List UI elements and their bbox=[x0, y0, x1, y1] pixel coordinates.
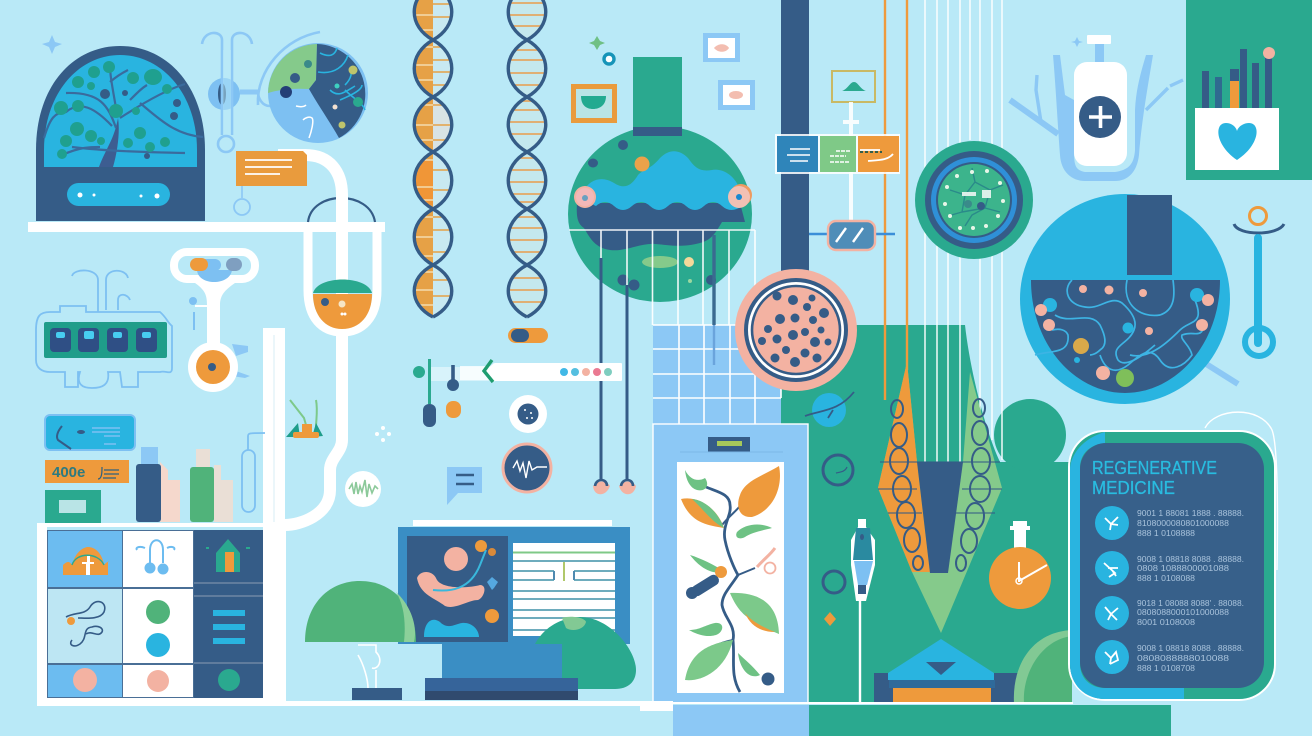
icon: thermometer probe bbox=[202, 33, 258, 152]
flask liquid bbox=[313, 280, 372, 329]
tissue diagram circle bbox=[1020, 194, 1238, 404]
list item 1: 9001 1 88081 1888 . 88888. bbox=[1137, 509, 1244, 518]
green dome right bbox=[1014, 630, 1072, 703]
drip lines with pink ends bbox=[593, 235, 714, 494]
frame icon with mound bbox=[832, 71, 875, 102]
circuit chip module bbox=[36, 270, 172, 388]
regenerative medicine panel bbox=[1069, 412, 1277, 700]
list item 4: 0808088888010088 bbox=[1137, 654, 1230, 663]
list item 3: 8001 0108008 bbox=[1137, 618, 1196, 627]
ring badges bbox=[823, 455, 853, 593]
list item 1 bbox=[1095, 506, 1244, 540]
anatomy illustration bbox=[417, 540, 499, 637]
cell: tools bbox=[48, 589, 122, 663]
helix funnel bbox=[878, 362, 1002, 633]
list item 4 bbox=[1095, 640, 1244, 674]
list item 3 bbox=[1095, 596, 1244, 630]
list item 4: 9008 1 08818 8088 . 88888. bbox=[1137, 644, 1244, 653]
list item 2 bbox=[1095, 551, 1244, 585]
dark vertical column bbox=[781, 0, 809, 275]
orange label: 400e bbox=[52, 464, 85, 481]
microscope lamp bbox=[174, 252, 255, 392]
document bbox=[513, 543, 615, 636]
cell: tent bbox=[48, 531, 122, 587]
teal bush bbox=[535, 617, 636, 689]
DNA helix right bbox=[506, 0, 548, 318]
sparkle dots bbox=[375, 426, 391, 442]
DNA helix left bbox=[412, 0, 454, 318]
clock bbox=[989, 521, 1051, 609]
leaves bbox=[681, 466, 780, 680]
orange label bbox=[45, 460, 129, 483]
blue picture frame one bbox=[703, 33, 740, 62]
base rail bbox=[38, 701, 1073, 711]
icon: sparkle bbox=[42, 35, 62, 54]
buds bbox=[686, 548, 776, 686]
thin vertical strands bbox=[885, 0, 1002, 462]
panel heading: REGENERATIVE bbox=[1092, 458, 1217, 478]
status pill bbox=[67, 183, 170, 206]
health chart card bbox=[1186, 0, 1312, 180]
orange note bbox=[234, 151, 307, 215]
cell disc badge bbox=[509, 395, 547, 433]
panel heading: MEDICINE bbox=[1092, 478, 1175, 498]
cell: dots bbox=[123, 589, 193, 663]
frame with data grid bbox=[37, 523, 286, 706]
green globe with chimney bbox=[568, 57, 752, 302]
monitor bbox=[398, 520, 630, 700]
house device bbox=[874, 639, 1020, 703]
blue picture frame two bbox=[718, 80, 755, 110]
cell: stethoscope bbox=[123, 531, 193, 587]
green dome and stand bbox=[305, 581, 416, 700]
tool with ring bbox=[1234, 208, 1284, 356]
blue cloud bbox=[583, 151, 742, 210]
IV bag bbox=[851, 519, 875, 703]
globe spots bbox=[588, 140, 716, 290]
list item 4: 888 1 0108708 bbox=[1137, 664, 1196, 673]
pie circle of tissue bbox=[258, 32, 368, 143]
bottles bbox=[136, 447, 233, 522]
three tab header bbox=[775, 134, 900, 174]
light blue grid bbox=[653, 325, 781, 425]
stem with crossbar bbox=[843, 102, 859, 225]
bottom row bbox=[48, 665, 240, 697]
pink nodes bbox=[574, 184, 752, 208]
vine bbox=[706, 487, 740, 692]
list item 2: 9008 1 08818 8088 . 88888. bbox=[1137, 555, 1244, 564]
bottle with plus bbox=[1010, 35, 1183, 181]
heart-rate badge bbox=[503, 444, 551, 492]
tissue nodes bbox=[1035, 285, 1214, 387]
test tube outline bbox=[242, 433, 265, 512]
list item 2: 888 1 0108088 bbox=[1137, 574, 1196, 583]
list item 1: 888 1 0108888 bbox=[1137, 529, 1196, 538]
toggle capsule bbox=[508, 328, 548, 343]
panel heading bbox=[1092, 458, 1217, 498]
cyan swoosh badge bbox=[805, 392, 854, 427]
goggles connector bbox=[809, 221, 895, 250]
green block bbox=[45, 490, 101, 523]
shelf, tube and pipes bbox=[28, 155, 385, 526]
white grid overlay bbox=[569, 230, 755, 325]
connector bar bbox=[413, 359, 622, 427]
list item 3: 0808088000101000088 bbox=[1137, 608, 1230, 617]
cyan device card bbox=[45, 415, 135, 450]
orange picture frame bbox=[571, 84, 617, 123]
sparkle and ring bbox=[589, 36, 614, 64]
green cell circle bbox=[915, 141, 1033, 259]
orange diamond bbox=[824, 612, 836, 626]
helix strands bbox=[890, 399, 990, 571]
list item 2: 0808 1088800001088 bbox=[1137, 564, 1230, 573]
column: dark bbox=[194, 530, 263, 698]
plant panel bbox=[653, 424, 808, 703]
dark cloud bbox=[577, 203, 745, 250]
waveform badge bbox=[345, 471, 381, 507]
teal background region bbox=[673, 325, 1171, 736]
arch panel with tree bbox=[36, 46, 205, 221]
speech bubble bbox=[447, 467, 482, 505]
cell dish circle bbox=[735, 269, 857, 391]
list item 1: 8108000080801000088 bbox=[1137, 519, 1230, 528]
tree bbox=[44, 61, 203, 167]
plant sprout bbox=[286, 400, 323, 438]
list item 3: 9018 1 08088 8088' . 88088. bbox=[1137, 599, 1244, 608]
vessels bbox=[1035, 280, 1205, 370]
